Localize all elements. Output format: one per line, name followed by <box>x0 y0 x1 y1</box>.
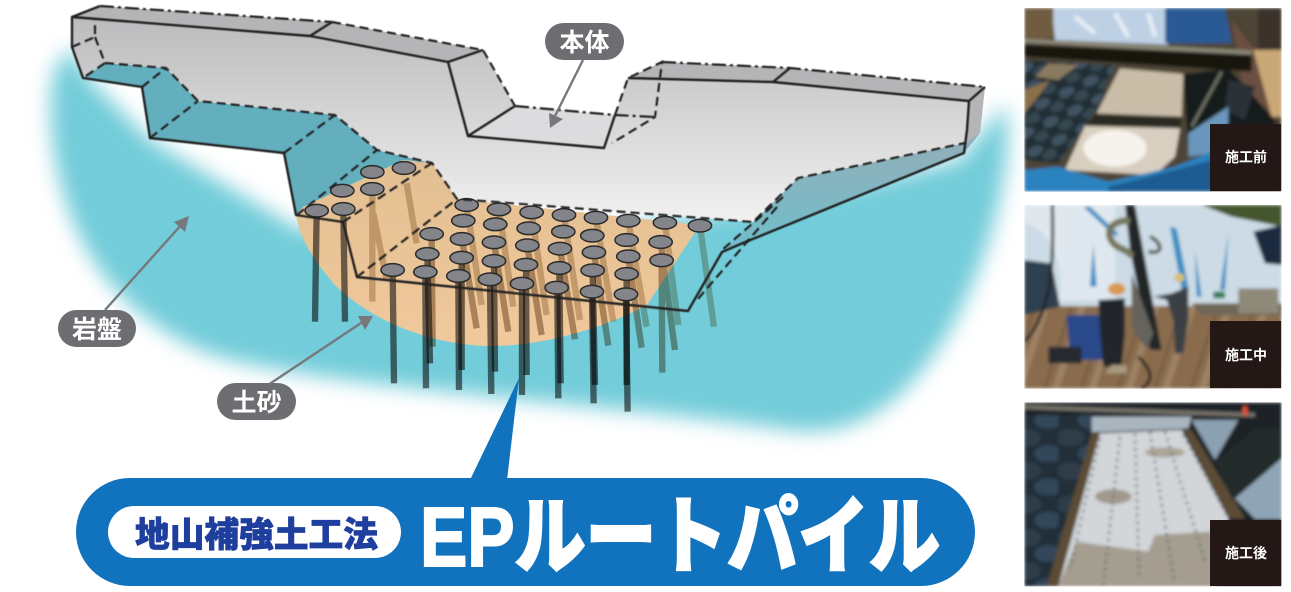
notch floor <box>468 106 615 148</box>
label: main body: 本体 <box>559 29 610 57</box>
method category pill: 地山補強土工法 <box>135 516 378 555</box>
method category pill <box>108 506 401 558</box>
outline: solid edges <box>72 6 985 311</box>
front row of piles <box>315 208 628 412</box>
middle rows of piles <box>432 234 675 373</box>
photo: after construction: 施工後 <box>1225 545 1267 561</box>
banner: method name <box>76 378 975 586</box>
photo: during construction: 施工中 <box>1225 347 1267 363</box>
caption box <box>1210 321 1281 388</box>
diagram: ground cross-section <box>72 6 985 412</box>
back rows of piles, light <box>372 183 714 327</box>
piles <box>315 183 714 412</box>
soil layer <box>296 160 700 346</box>
label: bedrock: 岩盤 <box>72 316 122 344</box>
outline: dashed hidden edges <box>72 20 965 300</box>
right cut slope, shaded <box>722 133 980 252</box>
pile heads <box>305 162 712 301</box>
outline: dash-dot top edges <box>100 6 985 117</box>
label: bedrock <box>58 216 189 347</box>
label: soil <box>217 316 373 420</box>
caption box <box>1210 520 1281 586</box>
left cut slope, shaded <box>83 63 432 215</box>
arrow to soil <box>268 316 373 385</box>
arrow to main body <box>549 60 583 128</box>
photo: before construction: 施工前 <box>1225 149 1267 165</box>
caption box <box>1210 124 1281 191</box>
second row of piles <box>427 254 627 385</box>
label: main body <box>545 23 624 128</box>
arrow to bedrock <box>105 216 189 310</box>
photo: during construction <box>1024 205 1282 389</box>
main body, grey block <box>72 6 985 222</box>
photo: before construction <box>1024 8 1282 192</box>
label: soil: 土砂 <box>231 389 282 417</box>
rock layer <box>0 0 1100 520</box>
photo: after construction <box>1024 402 1282 586</box>
method name: EPルートパイル <box>420 490 940 584</box>
banner pointer <box>470 378 519 480</box>
body top faces <box>72 6 985 143</box>
